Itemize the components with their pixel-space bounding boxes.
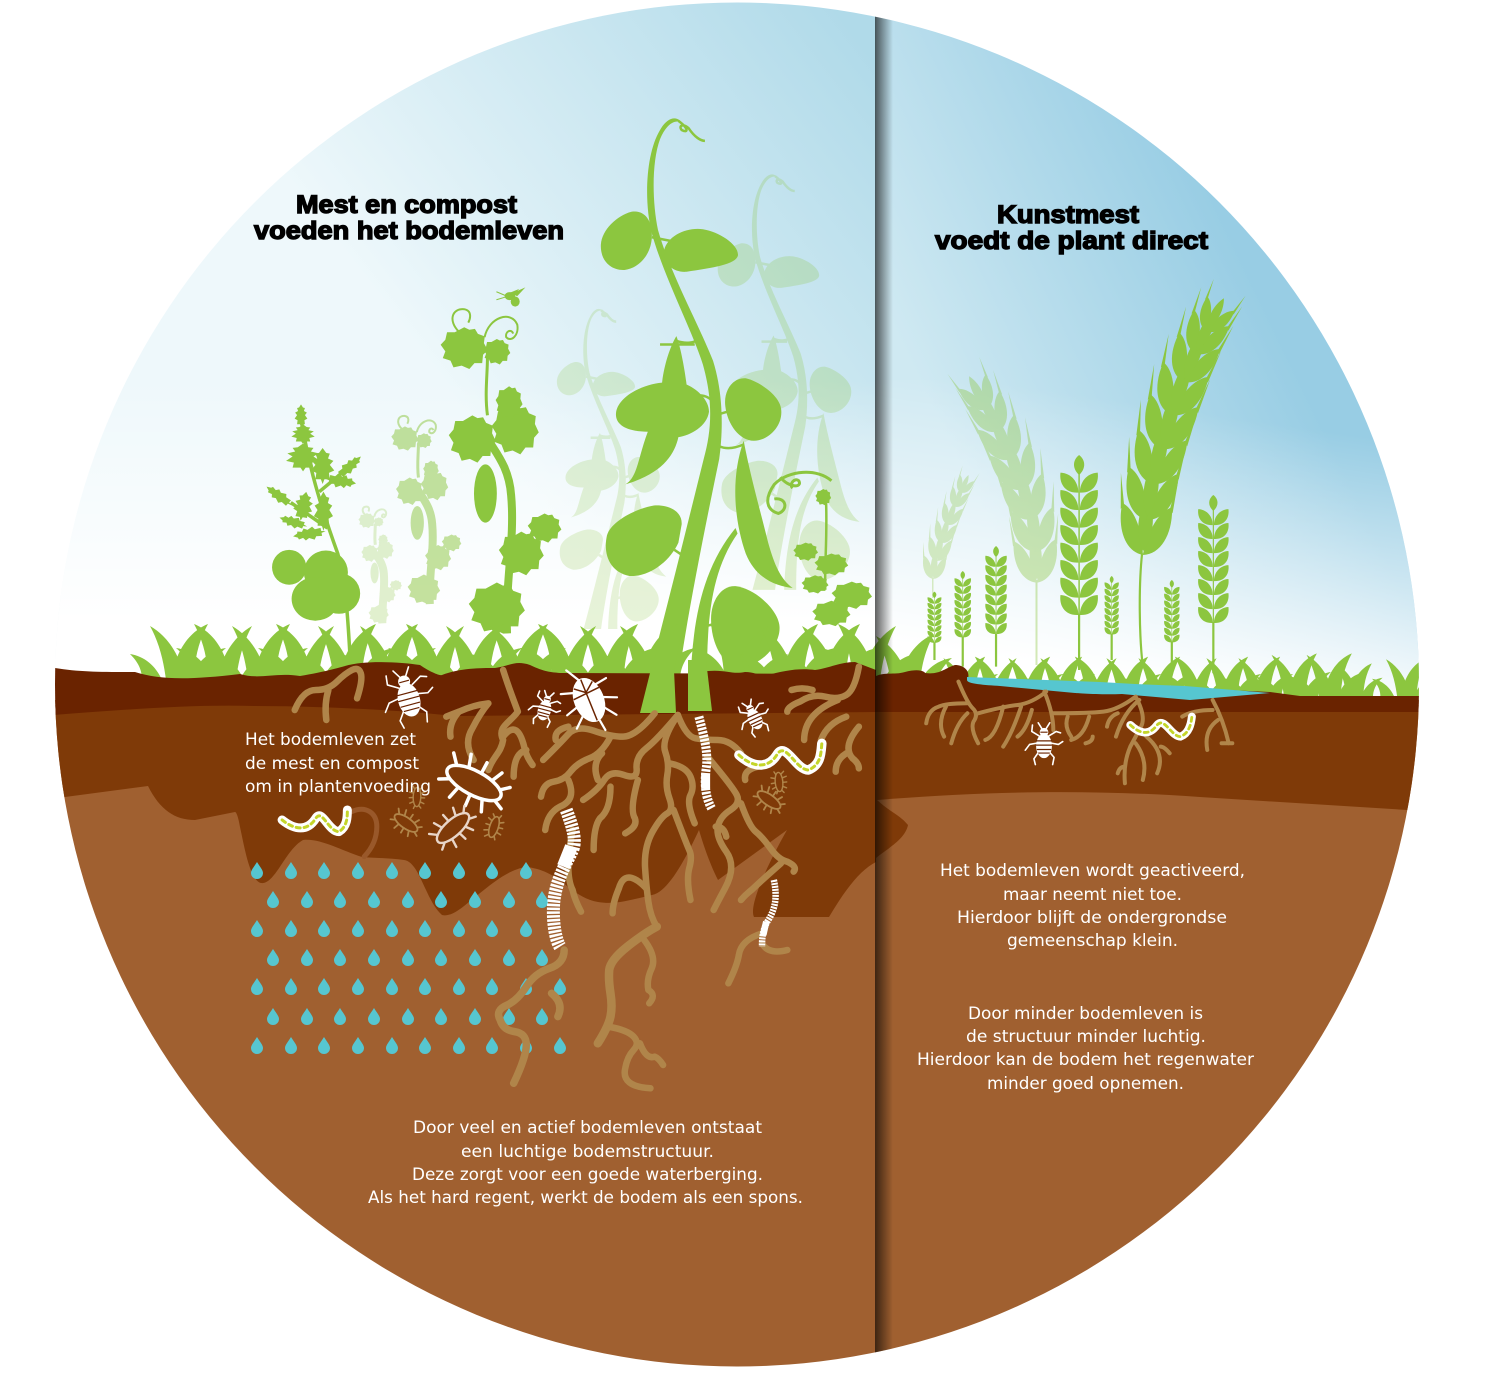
text: less soil life: Door minder bodemleven is <box>968 1004 1203 1023</box>
text: soil life activated: gemeenschap klein. <box>1007 931 1178 950</box>
bug right panel <box>1025 723 1063 765</box>
text: airy soil structure: Door veel en actief bodemleven ontstaat <box>413 1118 763 1137</box>
text: airy soil structure: Deze zorgt voor een goede waterberging. <box>412 1165 763 1184</box>
bug <box>384 666 434 729</box>
microbe light <box>428 804 477 851</box>
title: right: Kunstmest <box>997 201 1140 229</box>
wheat: upright stalks and large ear <box>927 279 1246 673</box>
microbe brown <box>751 783 788 818</box>
sky: right panel <box>876 0 1436 700</box>
soil: base layer <box>40 705 1440 1378</box>
bug small <box>738 698 770 738</box>
bee <box>496 287 525 307</box>
earthworm 1 <box>553 810 574 947</box>
title: right: voedt de plant direct <box>935 227 1209 255</box>
wheat: ghost ears <box>920 357 1062 665</box>
small worm 2 <box>739 743 822 770</box>
bug small <box>528 690 562 728</box>
title: left: voeden het bodemleven <box>254 217 564 245</box>
beetle <box>560 669 618 732</box>
grass: left and right <box>130 624 1439 697</box>
text: soil life converts manure: de mest en compost <box>245 754 420 773</box>
text: soil life converts manure: Het bodemleven zet <box>245 730 417 749</box>
earthworm 3 <box>762 880 776 947</box>
text: less soil life <box>917 1004 1254 1093</box>
microbe brown <box>390 808 423 838</box>
sky: left panel <box>79 2 876 574</box>
pea plant <box>601 118 793 680</box>
tomato plant <box>262 404 365 655</box>
roots: right panel <box>926 682 1232 783</box>
soil: top layer right <box>876 665 1440 712</box>
small worm 1 <box>282 810 347 832</box>
microbe brown small <box>770 771 788 794</box>
text: soil life activated: Het bodemleven wordt geactiveerd, <box>940 861 1245 880</box>
microbe brown small <box>482 812 506 841</box>
small worm right <box>1130 717 1192 737</box>
soil creatures: bugs <box>376 657 1063 765</box>
water drops <box>251 862 566 1054</box>
text: airy soil structure: Als het hard regent, werkt de bodem als een spons. <box>368 1188 803 1207</box>
title: left: Mest en compost <box>296 191 518 219</box>
ghost plants left <box>358 174 860 629</box>
soil: middle layer left <box>40 700 876 917</box>
text: soil life activated: maar neemt niet toe. <box>1003 885 1182 904</box>
soil microbes <box>388 746 788 855</box>
text: soil life converts manure: om in plantenvoeding <box>245 777 431 796</box>
text: soil life activated: Hierdoor blijft de ondergrondse <box>957 908 1227 927</box>
text: airy soil structure <box>368 1118 803 1207</box>
text: less soil life: minder goed opnemen. <box>987 1074 1184 1093</box>
microbe brown small <box>409 786 425 809</box>
text: airy soil structure: een luchtige bodemstructuur. <box>461 1142 714 1161</box>
text: less soil life: Hierdoor kan de bodem het regenwater <box>917 1050 1254 1069</box>
text: soil life activated <box>940 861 1245 950</box>
microbe white <box>437 751 512 814</box>
title: right <box>935 201 1209 255</box>
soil: middle layer right <box>876 700 1440 858</box>
text: less soil life: de structuur minder luchtig. <box>966 1027 1206 1046</box>
cucumber vine <box>441 309 561 633</box>
soil: top layer left <box>40 662 876 716</box>
roots: left panel <box>295 667 859 1088</box>
plant bases over soil <box>640 660 712 713</box>
title: left <box>254 191 564 245</box>
bush with tendril <box>768 472 872 626</box>
water strip on surface <box>967 677 1270 700</box>
plants: cucumber vine, tomato, bush, pea <box>262 118 872 680</box>
text: soil life converts manure <box>245 730 431 796</box>
earthworms <box>282 717 822 947</box>
earthworm 2 <box>699 717 712 808</box>
fold shadow in centre <box>875 0 893 1378</box>
